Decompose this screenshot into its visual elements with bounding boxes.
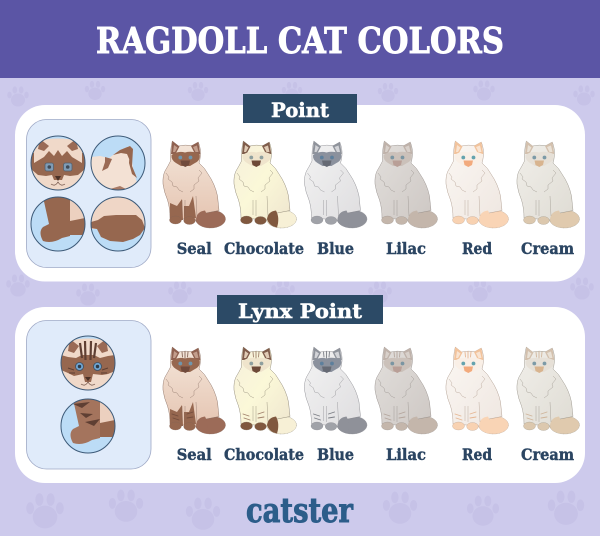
panel: lynx point (15, 295, 585, 483)
heading: lynx point (217, 295, 383, 324)
cat: seal point (163, 141, 226, 228)
cat: red lynx point (446, 347, 508, 434)
cat: blue lynx point (304, 347, 367, 434)
color labels: lynx point: Chocolate (224, 445, 304, 464)
color labels: point: Chocolate (224, 239, 304, 258)
color labels: lynx point: Blue (317, 445, 354, 464)
cat: blue point (304, 141, 367, 228)
heading: point: Point (271, 98, 330, 122)
cat: seal lynx point (163, 347, 226, 434)
color labels: point: Red (462, 239, 492, 258)
panel: point (15, 94, 585, 282)
logo: catster: catster (246, 491, 354, 531)
color labels: point: Blue (317, 239, 354, 258)
cat: red point (446, 141, 508, 228)
icon: tail detail (91, 197, 145, 251)
cat: chocolate lynx point (234, 347, 296, 434)
icon: ear detail (91, 136, 145, 190)
color labels: point: Seal (177, 239, 212, 258)
cat: lilac point (375, 141, 438, 228)
cat: cream lynx point (517, 347, 580, 434)
detail card: point markings (26, 120, 151, 268)
color labels: point (177, 239, 574, 258)
icon: paw detail (31, 197, 85, 251)
color labels: lynx point: Lilac (386, 445, 426, 464)
title: RAGDOLL CAT COLORS (96, 21, 504, 62)
color labels: lynx point: Seal (177, 445, 212, 464)
heading: lynx point: Lynx Point (238, 299, 363, 323)
title banner (0, 0, 600, 78)
color labels: lynx point: Cream (521, 445, 574, 464)
color labels: lynx point: Red (462, 445, 492, 464)
color labels: lynx point (177, 445, 574, 464)
icon: lynx leg detail (61, 399, 115, 453)
icon: lynx face detail (61, 336, 115, 390)
cat: lilac lynx point (375, 347, 438, 434)
cat: chocolate point (234, 141, 296, 228)
cat: cream point (517, 141, 580, 228)
heading: point (243, 94, 357, 123)
color labels: point: Lilac (386, 239, 426, 258)
icon: face detail (31, 136, 85, 190)
color labels: point: Cream (521, 239, 574, 258)
detail card: lynx markings (26, 320, 151, 469)
